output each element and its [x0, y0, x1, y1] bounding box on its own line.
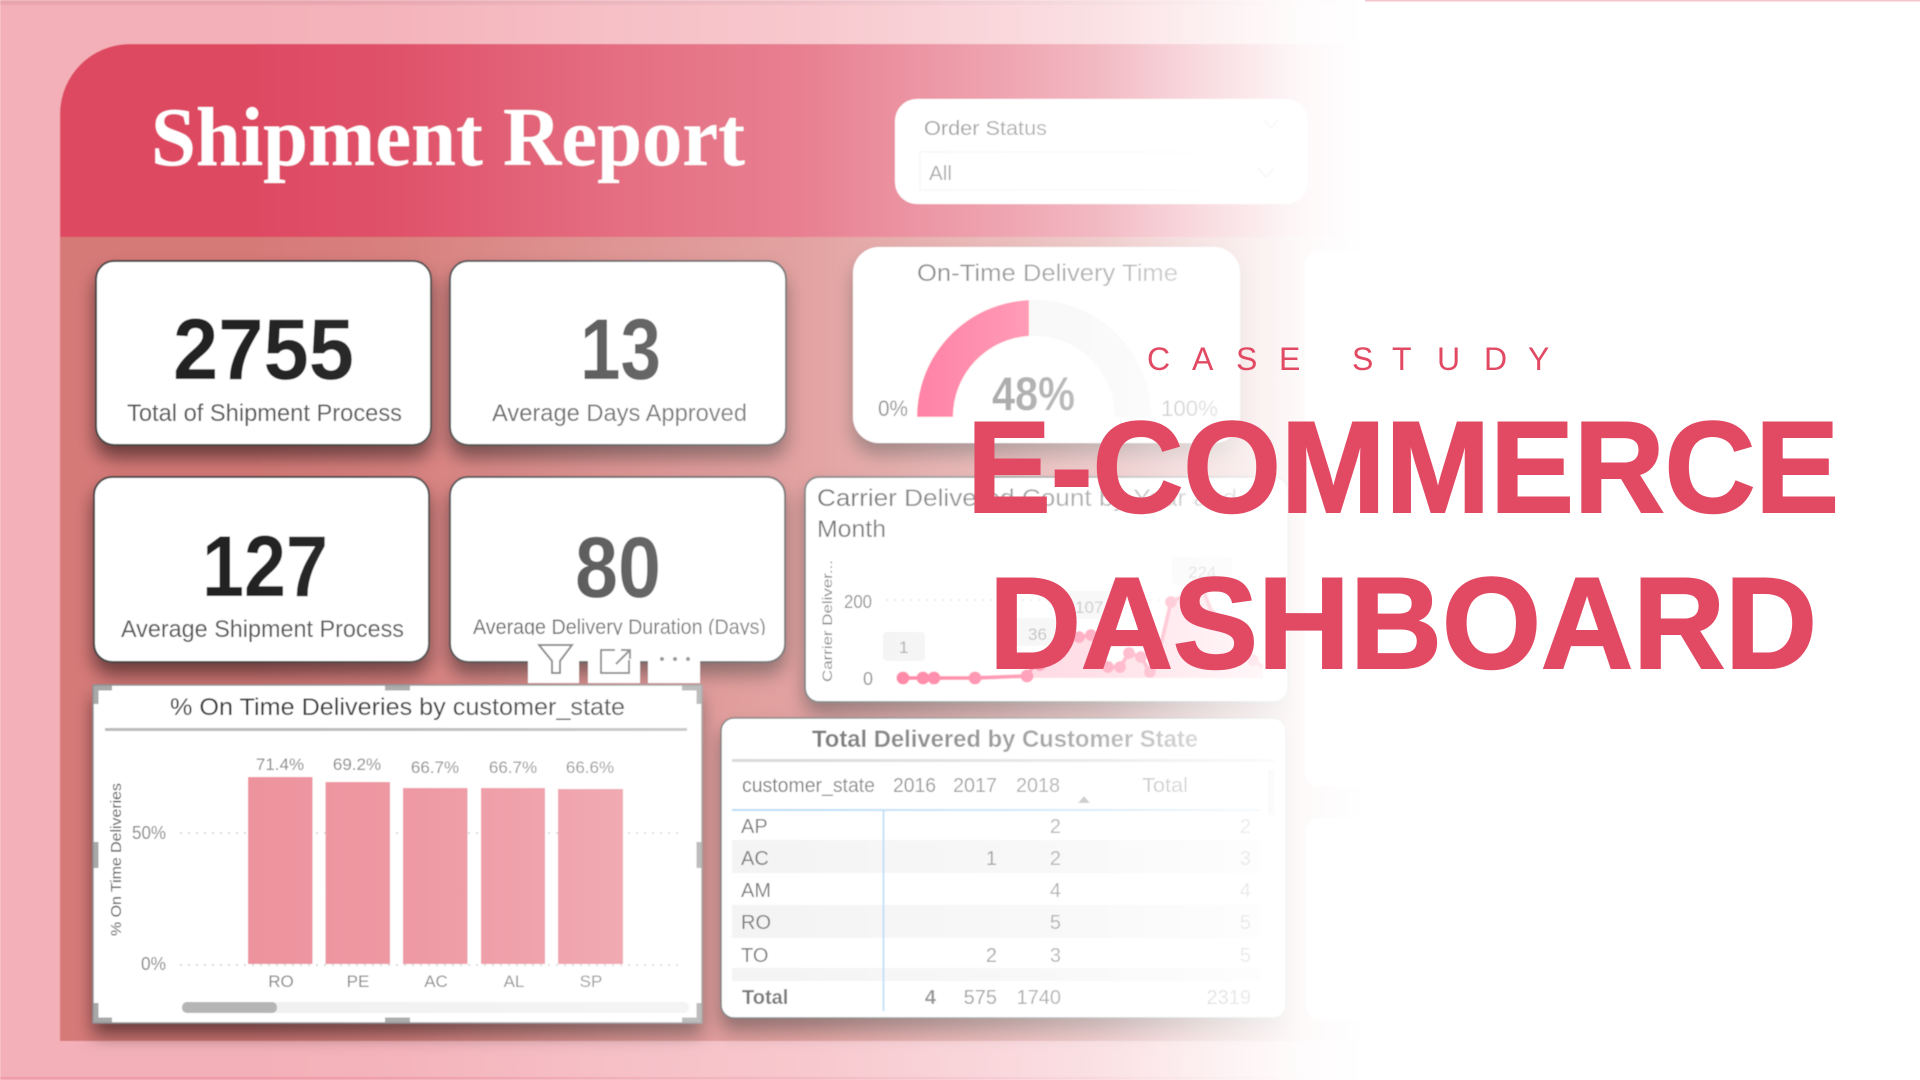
faint right cards — [1305, 251, 1426, 1020]
bar value labels: 71.4% — [256, 755, 304, 774]
gauge card: on-time delivery — [853, 247, 1240, 443]
order status filter — [895, 99, 1308, 204]
table card: total delivered by customer state: RO — [741, 912, 771, 934]
KPI card: average days approved: 13 — [580, 302, 661, 398]
gauge card: on-time delivery: 100% — [1161, 396, 1218, 421]
table card: total delivered by customer state: AC — [741, 848, 769, 870]
table card: total delivered by customer state: 2319 — [1206, 987, 1251, 1009]
visual header icons — [528, 645, 700, 683]
table card: total delivered by customer state: 2018 — [1016, 775, 1060, 797]
bar value labels: 66.7% — [411, 758, 459, 777]
table card: total delivered by customer state: 2 — [1240, 816, 1251, 838]
bar chart card: on time deliveries by state: 50% — [132, 823, 166, 843]
line chart card: carrier delivered count: 107 — [1075, 598, 1103, 617]
KPI card: total of shipment process: Total of Shipment Process — [127, 400, 402, 427]
table card: total delivered by customer state: Total Delivered by Customer State — [812, 726, 1198, 753]
KPI card: total of shipment process: 2755 — [173, 302, 354, 398]
table card: total delivered by customer state: 3 — [1050, 945, 1061, 967]
icon: more options — [660, 657, 690, 661]
title line: dashboard: DASHBOARD — [989, 550, 1817, 696]
table card: total delivered by customer state: 4 — [1240, 880, 1251, 902]
bar chart card: on time deliveries by state — [93, 685, 702, 1023]
table card: total delivered by customer state: 5 — [1240, 945, 1251, 967]
table card: total delivered by customer state: 3 — [986, 978, 997, 1000]
title line: e-commerce: E-COMMERCE — [967, 394, 1839, 540]
table card: total delivered by customer state: 2 — [1050, 848, 1061, 870]
bar category labels: RO — [268, 972, 294, 991]
table card: total delivered by customer state: 1 — [986, 848, 997, 870]
table card: total delivered by customer state: 575 — [964, 987, 997, 1009]
gauge card: on-time delivery: 0% — [878, 396, 908, 421]
table card: total delivered by customer state: 1740 — [1016, 987, 1061, 1009]
table card: total delivered by customer state: AM — [741, 880, 771, 902]
dashboard body panel — [60, 200, 1365, 1041]
table card: total delivered by customer state: TO — [741, 945, 768, 967]
bar chart card: on time deliveries by state: 0% — [141, 954, 166, 974]
icon: focus mode — [601, 650, 630, 673]
bar chart card: on time deliveries by state: % On Time Deliveries — [108, 783, 125, 936]
line chart card: carrier delivered count: Carrier Deliver... — [819, 560, 835, 682]
bar category labels — [268, 972, 602, 991]
line chart card: carrier delivered count: 0 — [863, 669, 873, 689]
table card: total delivered by customer state: 2017 — [953, 775, 997, 797]
table card: total delivered by customer state — [721, 718, 1286, 1018]
case study title block — [967, 341, 1839, 696]
line chart card: carrier delivered count: 36 — [1028, 625, 1047, 644]
table card: total delivered by customer state: 5 — [1050, 912, 1061, 934]
gauge card: on-time delivery: 48% — [992, 367, 1075, 420]
line chart card: carrier delivered count: 200 — [844, 592, 872, 612]
KPI card: average days approved: Average Days Approved — [492, 400, 747, 427]
bars — [248, 777, 623, 964]
bar category labels: AC — [424, 972, 448, 991]
line chart card: carrier delivered count — [805, 477, 1288, 702]
bar chart card: on time deliveries by state: % On Time Deliveries by customer_state — [170, 694, 625, 721]
KPI card: average shipment process: Average Shipment Process — [121, 616, 404, 643]
KPI card: average delivery duration — [450, 477, 785, 662]
bar value labels — [256, 755, 614, 777]
KPI card: total of shipment process — [96, 261, 431, 445]
table card: total delivered by customer state: 2 — [1050, 816, 1061, 838]
table card: total delivered by customer state: 4 — [1050, 880, 1061, 902]
eyebrow: case study: CASE STUDY — [1147, 341, 1549, 377]
table card: total delivered by customer state: SE — [741, 978, 768, 1000]
table card: total delivered by customer state: customer_state — [742, 775, 875, 797]
table card: total delivered by customer state: 9 — [1240, 978, 1251, 1000]
table card: total delivered by customer state: 3 — [1240, 848, 1251, 870]
table card: total delivered by customer state: 5 — [1240, 912, 1251, 934]
bar category labels: SP — [580, 972, 602, 991]
order status filter: Order Status — [924, 118, 1047, 140]
line chart card: carrier delivered count: 1 — [899, 638, 908, 657]
bar value labels: 69.2% — [333, 755, 381, 774]
dashboard screenshot — [0, 0, 1426, 1080]
icon: filter funnel — [539, 645, 572, 673]
KPI card: average shipment process: 127 — [202, 519, 328, 615]
bar value labels: 66.7% — [489, 758, 537, 777]
line chart card: carrier delivered count: Month — [817, 516, 886, 543]
table card: total delivered by customer state: Total — [1142, 775, 1188, 797]
table card: total delivered by customer state: 2016 — [893, 775, 936, 797]
header banner — [60, 44, 1365, 237]
KPI card: average shipment process — [94, 477, 429, 662]
KPI card: average days approved — [450, 261, 786, 445]
table card: total delivered by customer state: 6 — [1050, 978, 1061, 1000]
heading: Shipment Report: Shipment Report — [151, 91, 745, 184]
KPI card: average delivery duration: 80 — [575, 520, 661, 616]
line chart card: carrier delivered count: Carrier Delivered Count by Year and — [817, 485, 1237, 512]
line chart card: carrier delivered count: 224 — [1188, 563, 1216, 582]
gauge card: on-time delivery: On-Time Delivery Time — [917, 260, 1178, 287]
table card: total delivered by customer state: Total — [742, 987, 788, 1009]
selection frame — [96, 688, 699, 1020]
bar value labels: 66.6% — [566, 758, 614, 777]
KPI card: average delivery duration: Average Delivery Duration (Days) — [473, 616, 766, 639]
scrollbar — [182, 1002, 689, 1013]
bar category labels: AL — [504, 972, 524, 991]
bar category labels: PE — [347, 972, 369, 991]
table card: total delivered by customer state: 4 — [925, 987, 937, 1009]
table card: total delivered by customer state: AP — [741, 816, 768, 838]
table card: total delivered by customer state: 2 — [986, 945, 997, 967]
order status filter: All — [929, 163, 952, 185]
